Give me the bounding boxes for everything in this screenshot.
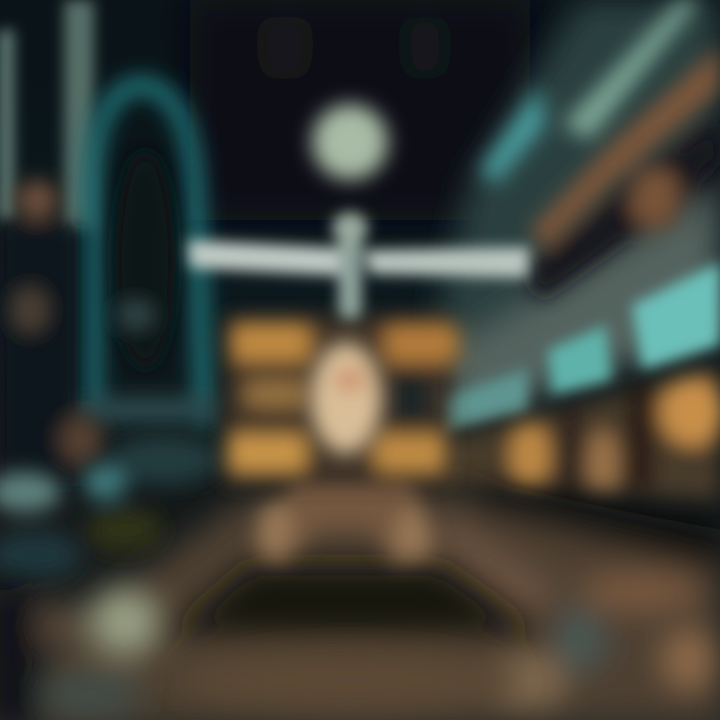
floor [40, 490, 720, 720]
left columns [0, 0, 94, 230]
teal arch [75, 85, 210, 420]
central pale sign [310, 342, 382, 454]
left tower [0, 180, 104, 485]
central dark floor shadow [170, 565, 540, 710]
right wall [440, 0, 720, 430]
copper diagonal band [525, 45, 720, 300]
horizontal white band with stem [188, 212, 530, 320]
lower left teal blocks [0, 435, 220, 580]
ceiling [190, 0, 530, 220]
central orange lights [225, 315, 460, 485]
right teal windows [436, 262, 720, 432]
central table [250, 470, 440, 565]
right shop lights [440, 365, 720, 500]
teal ceiling panels [480, 0, 700, 185]
pendant globe [312, 104, 388, 180]
lower left dark edge and pale floor [0, 588, 161, 720]
arch interior [115, 150, 175, 370]
